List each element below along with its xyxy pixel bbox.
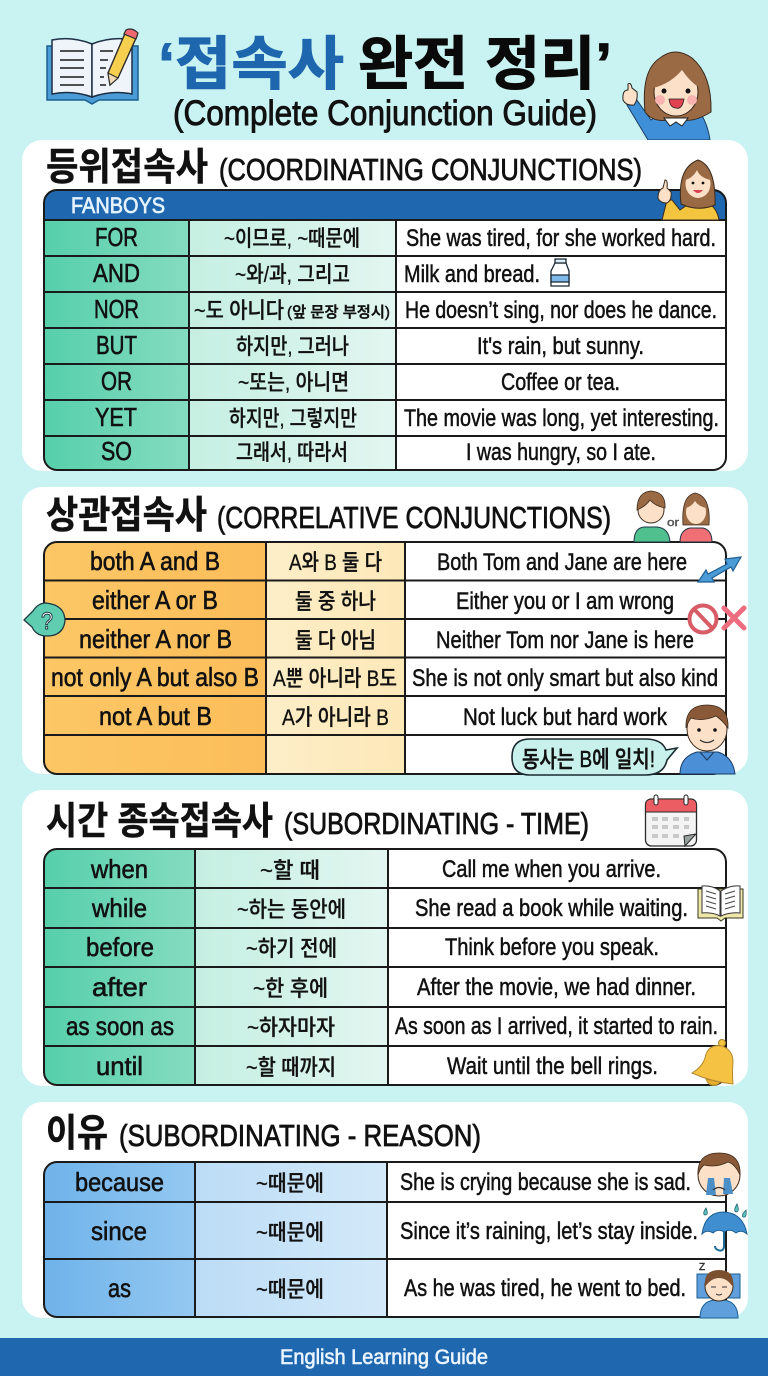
meaning column: ~한 후에 bbox=[253, 976, 328, 1001]
example column: Think before you speak. bbox=[445, 934, 659, 961]
icon: milk carton bbox=[551, 259, 569, 286]
example column: She is crying because she is sad. bbox=[400, 1169, 691, 1196]
icon: open book bbox=[698, 886, 743, 921]
panel: correlative conjunctions bbox=[22, 487, 748, 775]
meaning column: 둘 다 아님 bbox=[295, 628, 376, 653]
example column: She is not only smart but also kind bbox=[412, 665, 718, 692]
meaning column: A가 아니라 B bbox=[282, 705, 389, 730]
meaning column: (앞 문장 부정시) bbox=[287, 304, 390, 321]
speech bubble: 동사는 B에 일치! bbox=[522, 746, 655, 772]
meaning column: A뿐 아니라 B도 bbox=[273, 666, 397, 691]
icon: sleeping person bbox=[697, 1262, 740, 1318]
footer: English Learning Guide bbox=[280, 1346, 488, 1369]
table header: FANBOYS bbox=[71, 193, 165, 218]
example column: Call me when you arrive. bbox=[442, 856, 661, 883]
icon: question bubble bbox=[24, 603, 65, 636]
icon: crying face bbox=[698, 1153, 740, 1196]
panel: subordinating time bbox=[22, 790, 748, 1086]
table: time bbox=[44, 849, 726, 1085]
heading: reason bbox=[46, 1113, 481, 1155]
conjunction column: as bbox=[108, 1273, 131, 1303]
icon: question bubble: ? bbox=[41, 608, 53, 635]
meaning column: 그래서, 따라서 bbox=[236, 440, 348, 465]
example column: It's rain, but sunny. bbox=[477, 333, 644, 360]
example column: Neither Tom nor Jane is here bbox=[436, 627, 694, 654]
meaning column bbox=[273, 550, 397, 730]
conjunction column bbox=[66, 854, 174, 1081]
icon: two people with or bbox=[634, 491, 712, 542]
icon: umbrella with raindrops bbox=[702, 1204, 747, 1251]
icon: open book with pencil bbox=[47, 29, 138, 104]
meaning column: ~이므로, ~때문에 bbox=[224, 226, 360, 251]
heading: correlative bbox=[46, 495, 611, 537]
pair column: both A and B bbox=[90, 546, 220, 576]
conjunction column: before bbox=[86, 932, 154, 962]
conjunction column: when bbox=[90, 854, 148, 884]
meaning column: 둘 중 하나 bbox=[295, 589, 376, 614]
panel: subordinating reason bbox=[22, 1102, 748, 1318]
heading: reason: (SUBORDINATING - REASON) bbox=[119, 1118, 481, 1153]
conjunction column: until bbox=[96, 1051, 143, 1081]
meaning column bbox=[256, 1171, 324, 1302]
conjunction column bbox=[93, 222, 140, 466]
meaning column: ~또는, 아니면 bbox=[238, 370, 349, 395]
meaning column: 하지만, 그렇지만 bbox=[229, 406, 357, 431]
meaning column: ~와/과, 그리고 bbox=[235, 262, 350, 287]
example column: She read a book while waiting. bbox=[415, 895, 688, 922]
subtitle: (Complete Conjunction Guide) bbox=[173, 94, 597, 133]
meaning column bbox=[237, 858, 346, 1080]
example column: I was hungry, so I ate. bbox=[466, 439, 656, 466]
heading: coordinating bbox=[46, 147, 642, 189]
meaning column: 하지만, 그러나 bbox=[236, 334, 349, 359]
pair column: not only A but also B bbox=[51, 662, 259, 692]
conjunction column: SO bbox=[101, 436, 132, 466]
heading: time bbox=[46, 801, 589, 843]
meaning column: ~하는 동안에 bbox=[237, 897, 346, 922]
panel: coordinating conjunctions bbox=[22, 140, 748, 471]
icon: two people with or: or bbox=[667, 517, 679, 529]
icon: sleeping person: Z bbox=[699, 1262, 705, 1273]
conjunction column: FOR bbox=[95, 222, 138, 252]
conjunction column bbox=[75, 1167, 164, 1303]
pair column: not A but B bbox=[99, 701, 212, 731]
example column bbox=[395, 856, 718, 1080]
conjunction column: after bbox=[92, 972, 147, 1002]
conjunction column: OR bbox=[101, 366, 132, 396]
meaning column: A와 B 둘 다 bbox=[289, 550, 382, 575]
icon: woman pointing bbox=[658, 160, 719, 220]
pair column: either A or B bbox=[92, 585, 218, 615]
example column: Both Tom and Jane are here bbox=[437, 549, 687, 576]
conjunction column: NOR bbox=[94, 294, 139, 324]
conjunction column: YET bbox=[95, 402, 137, 432]
heading: time: (SUBORDINATING - TIME) bbox=[284, 806, 589, 841]
meaning column: ~도 아니다 bbox=[194, 298, 284, 323]
example column: Coffee or tea. bbox=[501, 369, 620, 396]
example column: As he was tired, he went to bed. bbox=[404, 1275, 686, 1302]
conjunction column: since bbox=[91, 1216, 147, 1246]
title bbox=[158, 32, 612, 97]
meaning column: ~하자마자 bbox=[247, 1015, 335, 1040]
conjunction column: as soon as bbox=[66, 1011, 174, 1041]
title: ‘접속사 bbox=[158, 32, 344, 97]
pair column: neither A nor B bbox=[79, 624, 232, 654]
speech bubble bbox=[512, 739, 677, 775]
heading: correlative: 상관접속사 bbox=[46, 495, 207, 537]
conjunction column: AND bbox=[93, 258, 140, 288]
example column: Not luck but hard work bbox=[463, 704, 668, 731]
heading: reason: 이유 bbox=[46, 1113, 108, 1155]
example column bbox=[400, 1169, 698, 1302]
heading: coordinating: 등위접속사 bbox=[46, 147, 208, 189]
title: 완전 정리’ bbox=[358, 32, 612, 97]
meaning column: ~하기 전에 bbox=[246, 936, 337, 961]
example column bbox=[404, 225, 719, 466]
example column: Wait until the bell rings. bbox=[447, 1053, 658, 1080]
example column: Since it’s raining, let’s stay inside. bbox=[400, 1218, 698, 1245]
meaning column: ~할 때 bbox=[260, 858, 320, 883]
conjunction column: because bbox=[75, 1167, 164, 1197]
example column: Milk and bread. bbox=[404, 261, 540, 288]
meaning column bbox=[194, 226, 390, 465]
icon: red x bbox=[724, 608, 744, 628]
meaning column: ~할 때까지 bbox=[246, 1055, 336, 1080]
table: correlative bbox=[44, 542, 726, 774]
icon: bell bbox=[692, 1040, 733, 1085]
heading: correlative: (CORRELATIVE CONJUNCTIONS) bbox=[217, 500, 611, 535]
icon: double arrow bbox=[698, 557, 741, 582]
icon: pointing girl bbox=[623, 52, 711, 140]
heading: time: 시간 종속접속사 bbox=[46, 801, 273, 843]
conjunction column: while bbox=[91, 893, 147, 923]
icon: prohibition sign bbox=[690, 606, 716, 632]
table: reason bbox=[44, 1162, 726, 1317]
icon: boy with speech bubble bbox=[512, 705, 735, 775]
heading: coordinating: (COORDINATING CONJUNCTIONS) bbox=[219, 152, 642, 187]
footer bbox=[0, 1338, 768, 1376]
icon: calendar bbox=[646, 795, 696, 846]
meaning column: ~때문에 bbox=[256, 1277, 324, 1302]
table: FANBOYS bbox=[44, 190, 726, 470]
header bbox=[47, 29, 711, 140]
meaning column: ~때문에 bbox=[256, 1220, 324, 1245]
example column bbox=[412, 549, 718, 731]
meaning column: ~때문에 bbox=[256, 1171, 324, 1196]
conjunction column: BUT bbox=[96, 330, 137, 360]
example column: After the movie, we had dinner. bbox=[417, 974, 696, 1001]
example column: Either you or I am wrong bbox=[456, 588, 674, 615]
pair column bbox=[51, 546, 259, 731]
